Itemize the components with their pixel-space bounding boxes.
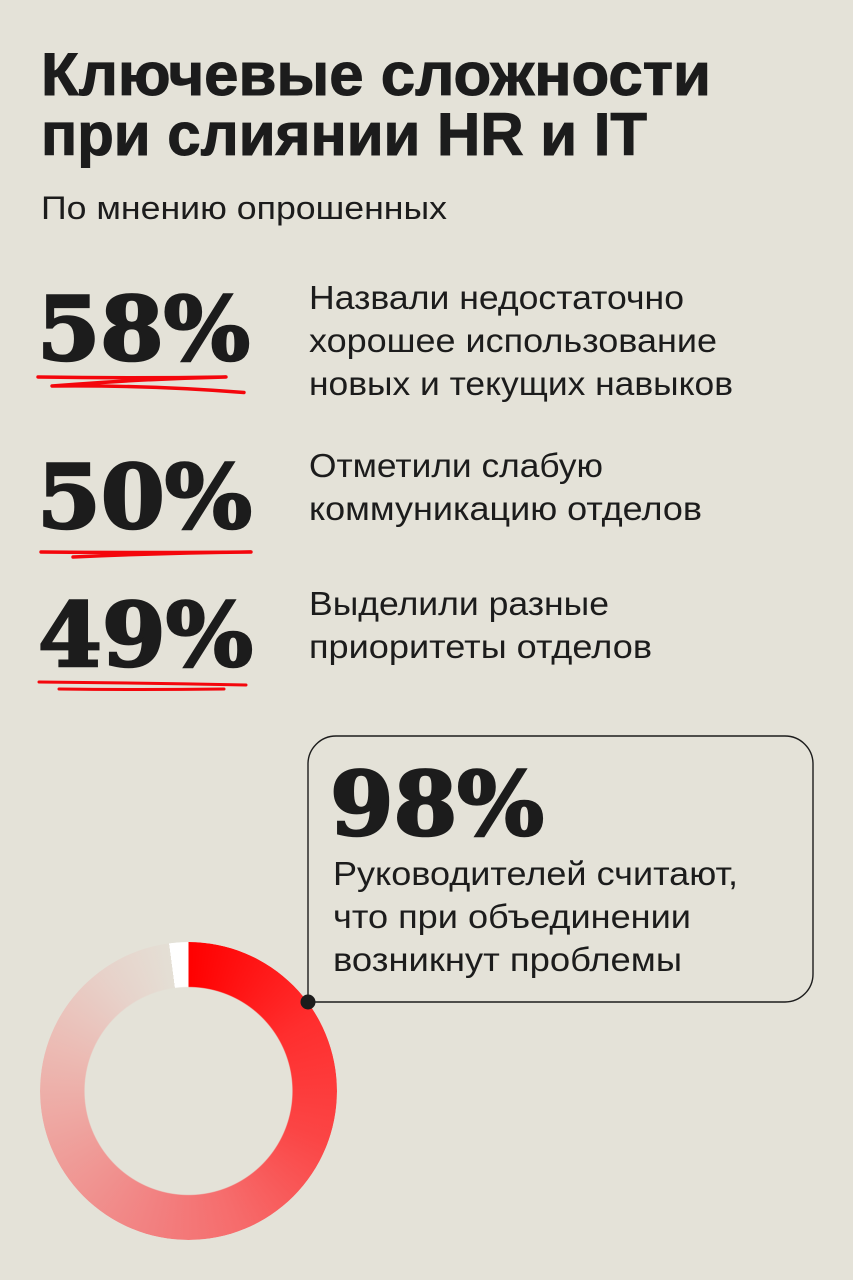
stat: 49% xyxy=(38,583,652,690)
text: 50% description: Отметили слабую xyxy=(309,447,603,484)
title: при слиянии HR и IT xyxy=(41,101,647,168)
callout text: Руководителей считают, xyxy=(333,855,738,892)
stat: 58% xyxy=(37,277,733,402)
text: 58% description: новых и текущих навыков xyxy=(309,365,733,402)
underline: 49% xyxy=(39,682,246,690)
callout text: что при объединении xyxy=(333,898,691,935)
connector dot xyxy=(300,994,316,1010)
callout: 98% xyxy=(300,736,813,1010)
donut chart: 98% xyxy=(40,942,337,1240)
text: 50% description xyxy=(309,447,702,527)
stat: 50% xyxy=(37,445,702,557)
stat: 49%: 49% xyxy=(38,583,253,687)
text: 58% description: Назвали недостаточно xyxy=(309,279,684,316)
text: 49% description: приоритеты отделов xyxy=(309,628,652,665)
stat: 50%: 50% xyxy=(37,445,252,549)
underline: 50% xyxy=(41,552,251,557)
underline: 58% xyxy=(38,377,244,392)
callout text: возникнут проблемы xyxy=(333,941,682,978)
callout number: 98% xyxy=(330,752,544,856)
text: 58% description: хорошее использование xyxy=(309,322,717,359)
title xyxy=(41,41,711,168)
text: 49% description xyxy=(309,585,652,665)
callout text xyxy=(333,855,738,978)
text: 49% description: Выделили разные xyxy=(309,585,609,622)
text: 50% description: коммуникацию отделов xyxy=(309,490,702,527)
callout frame xyxy=(308,736,813,1002)
subtitle: По мнению опрошенных xyxy=(41,190,447,226)
title: Ключевые сложности xyxy=(41,41,711,108)
text: 58% description xyxy=(309,279,733,402)
stat: 58%: 58% xyxy=(37,277,250,381)
